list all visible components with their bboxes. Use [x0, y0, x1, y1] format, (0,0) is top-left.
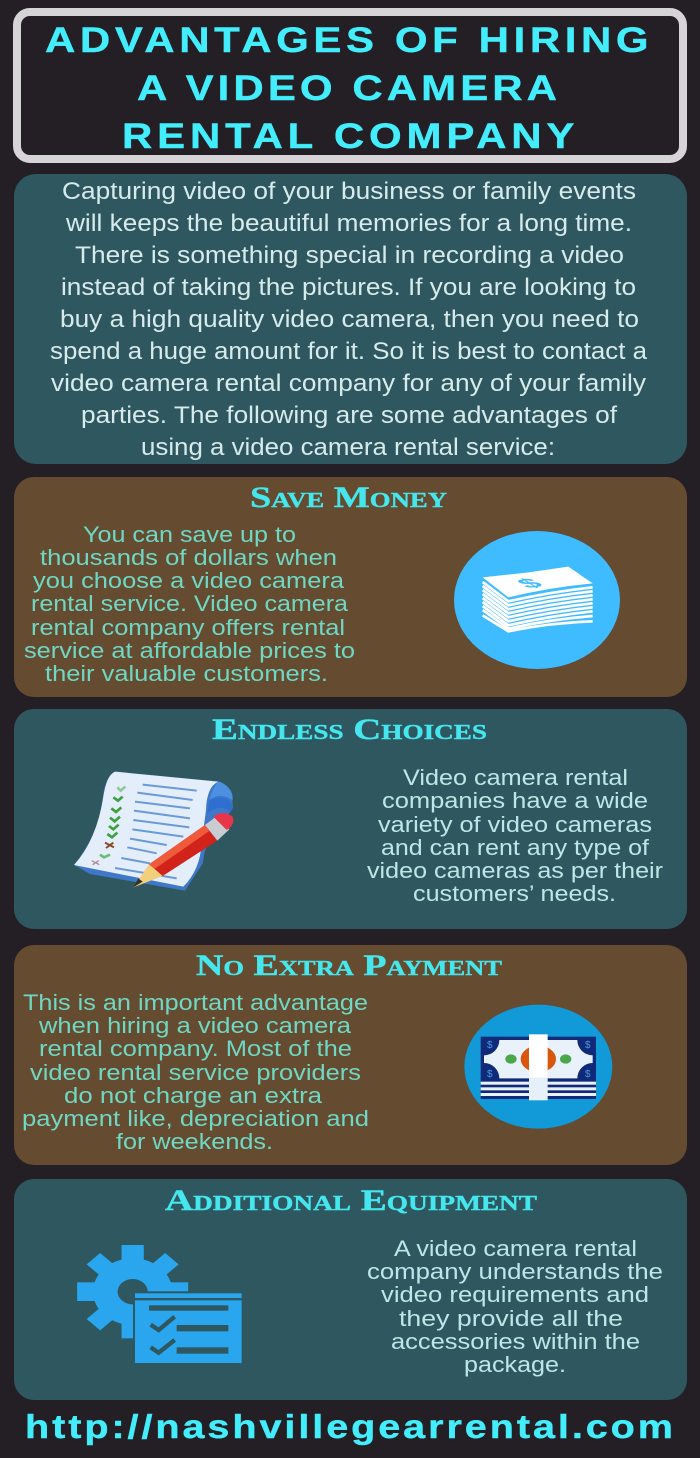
icon: banknote bundle	[464, 1005, 612, 1129]
panel: no extra payment	[14, 945, 687, 1165]
heading: save money: Save Money	[250, 481, 447, 514]
additional equipment text: A video camera rental	[394, 1236, 637, 1261]
endless choices text: Video camera rental	[403, 765, 628, 790]
title text: RENTAL COMPANY	[122, 117, 575, 156]
endless choices text: customers’ needs.	[413, 881, 616, 906]
save money text: rental company offers rental	[31, 615, 345, 640]
title text	[45, 21, 649, 156]
no extra payment text: when hiring a video camera	[38, 1013, 352, 1038]
endless choices text	[367, 765, 664, 906]
introduction text: There is something special in recording a video	[75, 242, 624, 269]
endless choices text: video cameras as per their	[367, 858, 664, 883]
heading: additional equipment: Additional Equipment	[165, 1184, 537, 1217]
no extra payment text: video rental service providers	[30, 1060, 361, 1085]
title text: A VIDEO CAMERA	[137, 69, 557, 108]
icon: banknote bundle: $	[487, 1069, 493, 1080]
introduction text: Capturing video of your business or family events	[62, 178, 636, 205]
save money text: service at affordable prices to	[24, 638, 355, 663]
introduction text: video camera rental company for any of your family	[51, 370, 646, 397]
no extra payment text: This is an important advantage	[23, 990, 368, 1015]
save money text	[24, 522, 355, 686]
introduction text	[50, 178, 648, 461]
no extra payment text: payment like, depreciation and	[22, 1106, 369, 1131]
additional equipment text: accessories within the	[391, 1329, 640, 1354]
endless choices text: and can rent any type of	[381, 835, 650, 860]
title panel	[17, 12, 683, 159]
save money text: you choose a video camera	[33, 568, 345, 593]
panel: endless choices	[14, 709, 687, 929]
icon: banknote bundle: $	[585, 1069, 591, 1080]
endless choices text: variety of video cameras	[378, 812, 652, 837]
introduction text: parties. The following are some advantages of	[81, 402, 617, 429]
website url: http://nashvillegearrental.com	[25, 1408, 673, 1445]
introduction text: using a video camera rental service:	[141, 434, 555, 461]
additional equipment text: package.	[464, 1352, 566, 1377]
heading: endless choices: Endless Choices	[212, 713, 487, 746]
additional equipment text	[367, 1236, 663, 1377]
icon: stack of money: $	[510, 575, 549, 591]
icon: stack of money	[454, 531, 620, 669]
additional equipment text: they provide all the	[399, 1306, 623, 1331]
icon: banknote bundle: $	[487, 1040, 493, 1051]
introduction text: instead of taking the pictures. If you are looking to	[61, 274, 636, 301]
heading: no extra payment: No Extra Payment	[196, 949, 502, 982]
save money text: You can save up to	[83, 522, 296, 547]
icon: checklist and pencil	[74, 772, 233, 891]
no extra payment text: do not charge an extra	[64, 1083, 323, 1108]
no extra payment text	[22, 990, 369, 1154]
panel: additional equipment	[14, 1179, 687, 1400]
introduction text: buy a high quality video camera, then you need to	[60, 306, 639, 333]
endless choices text: companies have a wide	[382, 788, 648, 813]
title text: ADVANTAGES OF HIRING	[45, 21, 649, 60]
save money text: their valuable customers.	[45, 661, 328, 686]
introduction text: spend a huge amount for it. So it is best to contact a	[50, 338, 648, 365]
additional equipment text: company understands the	[367, 1259, 663, 1284]
no extra payment text: for weekends.	[116, 1129, 273, 1154]
save money text: rental service. Video camera	[31, 591, 349, 616]
icon: banknote bundle: $	[585, 1040, 591, 1051]
no extra payment text: rental company. Most of the	[39, 1036, 352, 1061]
additional equipment text: video requirements and	[381, 1282, 649, 1307]
icon: gear and checklist	[77, 1245, 243, 1364]
introduction text: will keeps the beautiful memories for a long time.	[65, 210, 632, 237]
panel: save money	[14, 477, 687, 697]
save money text: thousands of dollars when	[40, 545, 337, 570]
panel: introduction	[14, 174, 687, 464]
